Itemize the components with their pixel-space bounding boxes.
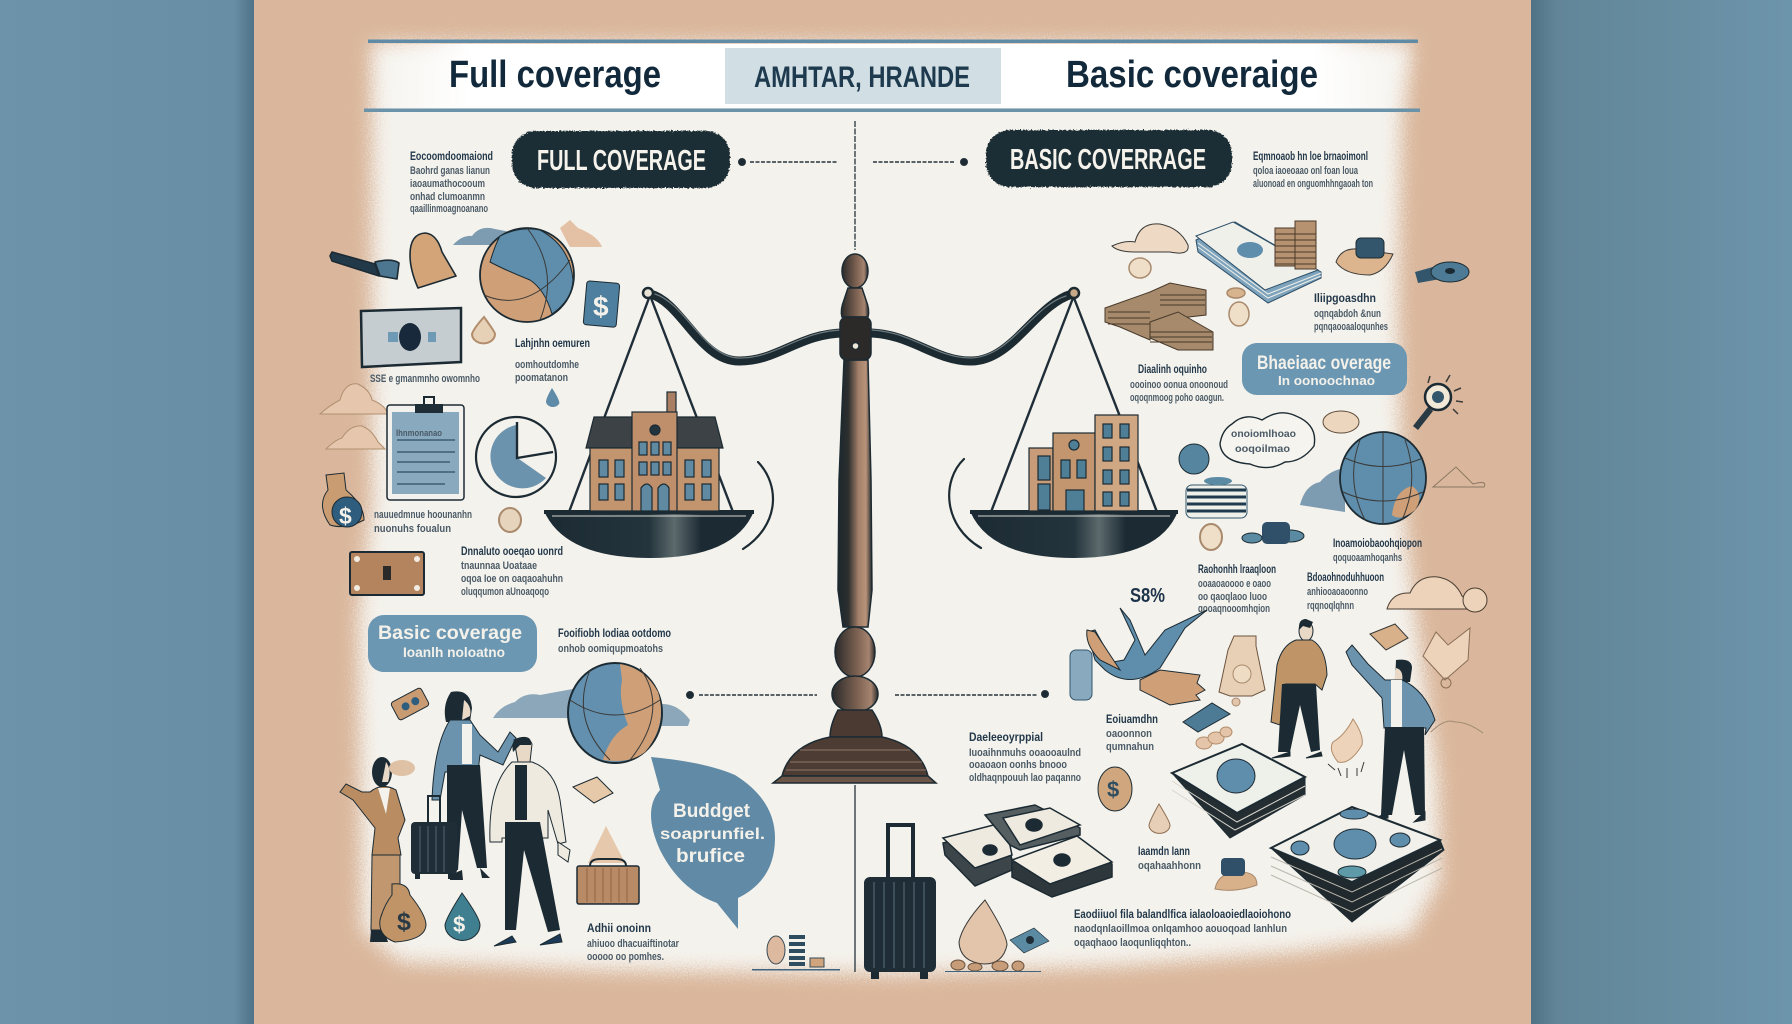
text block: lower centre right: Daeleeoyrppial	[969, 732, 1043, 744]
text block: right of coins: Iliipgoasdhn	[1314, 293, 1376, 305]
icon: small tan cloud	[560, 220, 602, 247]
text block: bottom left: ooooo oo pomhes.	[587, 951, 664, 963]
icon: dollar coin pouch: $	[339, 503, 352, 529]
callout: budget speech bubble: Buddget	[673, 801, 751, 822]
text block: beside left callout	[558, 628, 671, 655]
text block: beside suitcase: tnaunnaa Uoataae	[461, 560, 537, 572]
text block: below cash stack: oqahaahhonn	[1138, 860, 1201, 872]
icon: cash stack top right	[1196, 221, 1321, 303]
icon: speech cloud: ooqoilmao	[1235, 444, 1290, 455]
text block: right middle 2: Raohonhh lraaqloon	[1198, 564, 1276, 576]
scale strings	[569, 298, 1157, 512]
text block: top left: iaoaumathocooum	[410, 178, 485, 190]
scale finial	[840, 254, 871, 360]
icon: cash stack middle	[1172, 744, 1305, 838]
text block: top left: qaaillinmoagnoanano	[410, 203, 488, 215]
callout: blue pill right	[1242, 343, 1407, 395]
text block: top right	[1253, 151, 1373, 190]
figure: woman with blue jacket	[432, 691, 516, 880]
scale base	[773, 627, 936, 783]
text block: left of blue pill	[1130, 364, 1228, 404]
scale beam	[643, 288, 1079, 361]
text block: top left: onhad clumoanmn	[410, 191, 485, 203]
icon: speech cloud	[1220, 413, 1315, 468]
icon: coins on tan base	[1215, 858, 1257, 890]
icon: cash stack large	[1271, 807, 1444, 922]
icon: black rolling suitcase small	[411, 796, 457, 879]
text block: right middle 1: qoquoaamhoqanhs	[1333, 552, 1402, 564]
icon: cloud beside right globe	[1300, 468, 1345, 512]
connector: lower dashes and centre line	[686, 690, 1048, 972]
icon: cloud top right	[1112, 224, 1188, 253]
text block: right of coins: oqnqabdoh &nun	[1314, 308, 1381, 320]
text block: middle left: poomatanon	[515, 372, 568, 384]
icon: coin right of scale	[1200, 524, 1222, 550]
text block: under clock: nauuedmnue hoounanhn	[374, 509, 472, 521]
text block: right of coins	[1314, 293, 1388, 333]
icon: dollar coin pouch	[322, 473, 364, 529]
callout: blue pill right: In oonoochnao	[1278, 373, 1375, 388]
icon: paper clouds left	[320, 384, 388, 449]
figure: man in cream jacket	[490, 737, 570, 946]
icon: clipboard: Ihnmonanao	[396, 428, 442, 438]
callout: basic coverage left	[368, 615, 537, 672]
text block: under bird: qumnahun	[1106, 741, 1154, 753]
text block: lower centre right: ooaoaon oonhs bnooo	[969, 759, 1067, 771]
balance scale	[544, 254, 1178, 783]
text block: right middle 1: Inoamoiobaoohqiopon	[1333, 538, 1422, 550]
header centre box	[725, 48, 1001, 104]
percentage label: S8%	[1130, 585, 1165, 607]
text block: lower centre right: Iuoaihnmuhs ooaooaulnd	[969, 747, 1081, 759]
icon: large house on left pan	[586, 392, 723, 511]
text block: right middle 3: anhiooaoaoonno	[1307, 586, 1368, 598]
text block: top right: aluonoad en onguomhhngaoah ton	[1253, 178, 1373, 190]
icon: black suitcase large	[864, 825, 936, 979]
text block: right middle 3: rqqnoqlqhnn	[1307, 600, 1354, 612]
text block: bottom left	[587, 923, 680, 963]
panel: off-white comparison area	[358, 44, 1440, 974]
icon: cloud far right	[1387, 577, 1487, 612]
heading: basic coverage: Basic coveraige	[1066, 54, 1318, 96]
text block: top right: qoloa iaoeoaao onl foan loua	[1253, 165, 1359, 177]
text block: bottom right	[1074, 909, 1291, 949]
icon: bird and hands	[1070, 608, 1207, 705]
text block: top left	[410, 151, 493, 215]
text block: right middle 3	[1307, 572, 1384, 612]
icon: tan nuts	[1196, 727, 1232, 749]
icon: blue tilted card	[1010, 928, 1049, 953]
text block: under bird	[1106, 714, 1158, 753]
text block: beside suitcase: Dnnaluto ooeqao uonrd	[461, 546, 563, 558]
text block: top left: Eocoomdoomaiond	[410, 151, 493, 163]
icon: small coin	[499, 508, 521, 532]
icon: tilted tan diamond	[1370, 624, 1408, 650]
text block: right middle 2: qooaqnooomhqion	[1198, 603, 1270, 615]
text block: beside suitcase: oqoa Ioe on oaqaoahuhn	[461, 573, 563, 585]
text block: right of coins: pqnqaooaaloqunhes	[1314, 321, 1388, 333]
icon: dollar droplet	[445, 893, 480, 940]
icon: small card	[390, 687, 430, 721]
text block: beside left callout: onhob oomiqupmoatohs	[558, 643, 663, 655]
icon: coins flat	[1242, 522, 1304, 544]
motion arcs	[743, 459, 981, 549]
icon: clock	[476, 417, 556, 497]
callout: basic coverage left: Ioanlh noloatno	[403, 644, 505, 660]
pill: basic coverage	[986, 130, 1232, 187]
header band	[364, 40, 1420, 112]
icon: top left globe	[480, 228, 574, 322]
icon: city buildings on right pan	[1029, 415, 1138, 511]
icon: tilted small picture	[573, 777, 613, 803]
icon: dollar money bag	[380, 884, 426, 942]
callout: budget speech bubble	[651, 757, 775, 929]
icon: tan flame with stones	[945, 900, 1041, 972]
icon: dollar card	[583, 281, 620, 327]
icon: blue flashlight right	[1415, 262, 1469, 283]
text block: right middle 3: Bdoaohnoduhhuoon	[1307, 572, 1384, 584]
text block: beside suitcase: oluqqumon aUnoaqoqo	[461, 586, 549, 598]
icon: lower left globe	[568, 663, 662, 763]
callout: blue pill right: Bhaeiaac overage	[1257, 353, 1391, 374]
icon: magnifier lightbulb	[1413, 375, 1463, 430]
caption under banknote: SSE e gmanmnho owomnho	[370, 373, 480, 385]
text block: middle left	[515, 338, 590, 384]
icon: blue droplet	[546, 388, 559, 407]
icon: tan arch card	[410, 233, 456, 288]
icon: dollar egg: $	[1107, 777, 1119, 802]
text block: bottom right: oqaqhaoo laoqunliqqhton..	[1074, 937, 1191, 949]
icon: coin drop	[472, 317, 495, 343]
icon: dollar egg	[1098, 767, 1132, 811]
icon: tan shape over briefcase	[588, 826, 625, 863]
icon: two coins	[1227, 288, 1249, 326]
icon: right globe	[1340, 432, 1426, 524]
icon: brown suitcase small	[350, 552, 424, 595]
icon: flame with rays	[1328, 719, 1364, 778]
icon: dollar money bag: $	[397, 908, 411, 936]
text block: bottom left: ahiuoo dhacuaiftinotar	[587, 938, 680, 950]
pill: basic coverage: BASIC COVERRAGE	[1010, 144, 1206, 176]
icon: clipboard	[387, 397, 464, 500]
icon: nut shape	[1323, 411, 1359, 433]
text block: below cash stack	[1138, 846, 1201, 872]
header centre box: AMHTAR, HRANDE	[754, 61, 970, 94]
text block: under bird: Eoiuamdhn	[1106, 714, 1158, 726]
pill: full coverage: FULL COVERAGE	[537, 145, 706, 177]
text block: under clock	[374, 509, 472, 535]
text block: bottom right: naodqnlaoillmoa onlqamhoo aouoqoad lanhlun	[1074, 923, 1287, 935]
icon: blue coin	[1179, 444, 1209, 474]
text block: bottom right: Eaodiiuol fila balandlfica ialaoloaoiedlaoiohono	[1074, 909, 1291, 921]
icon: small triangle sketch	[1433, 467, 1485, 487]
text block: beside left callout: Fooifiobh Iodiaa ootdomo	[558, 628, 671, 640]
icon: small hills sketch	[1431, 721, 1483, 733]
text block: bottom left: Adhii onoinn	[587, 923, 651, 935]
icon: speech cloud: onoiomlhoao	[1231, 429, 1296, 440]
scale column	[838, 360, 872, 627]
text block: top left: Baohrd ganas lianun	[410, 165, 490, 177]
text block: left of blue pill: Diaalinh oquinho	[1138, 364, 1207, 376]
connector: top dashes and centre line	[738, 121, 968, 250]
icon: coin droplet	[1149, 804, 1170, 833]
icon: cloud behind lower globe	[493, 688, 690, 726]
icon: dollar droplet: $	[453, 912, 465, 937]
panel: tan paper sheet	[254, 0, 1531, 1024]
text block: right middle 2: oo qaoqlaoo luoo	[1198, 591, 1267, 603]
icon: leaf sketch	[1423, 628, 1470, 688]
text block: right middle 1	[1333, 538, 1422, 564]
text block: below cash stack: Iaamdn Iann	[1138, 846, 1190, 858]
icon: tan coin stacks	[1105, 283, 1213, 350]
callout: budget speech bubble: soaprunfiel.	[660, 826, 765, 843]
text block: middle left: Lahjnhn oemuren	[515, 338, 590, 350]
background: blue wall right	[1531, 0, 1792, 1024]
icon: coin under cloud	[1129, 258, 1151, 278]
text block: left of blue pill: oqoqnmoog poho oaogun.	[1130, 392, 1224, 404]
text block: under clock: nuonuhs foualun	[374, 523, 451, 535]
icon: blue coin stack	[1186, 477, 1247, 518]
text block: lower centre right	[969, 732, 1081, 784]
callout: basic coverage left: Basic coverage	[378, 623, 522, 644]
text block: under bird: oaoonnon	[1106, 728, 1152, 740]
text block: middle left: oomhoutdomhe	[515, 359, 579, 371]
heading: full coverage: Full coverage	[449, 54, 661, 96]
icon: banknote	[361, 308, 461, 367]
figure: man in tan sweater	[1271, 619, 1327, 758]
scale right pan	[970, 510, 1178, 558]
text block: top right: Eqmnoaob hn loe brnaoimonl	[1253, 151, 1368, 163]
icon: dollar card: $	[593, 291, 609, 322]
figure: woman with tan suit	[340, 757, 415, 942]
text block: beside suitcase	[461, 546, 563, 598]
background: blue wall left	[0, 0, 254, 1024]
scale left pan	[544, 510, 754, 558]
icon: money bundles	[943, 805, 1112, 897]
text block: right middle 2: ooaaoaoooo e oaoo	[1198, 578, 1271, 590]
icon: cloud behind top globe	[453, 228, 510, 245]
icon: coin and stack bottom	[752, 935, 840, 970]
text block: lower centre right: oldhaqnpouuh lao paqanno	[969, 772, 1081, 784]
text block: left of blue pill: oooinoo oonua onoonoud	[1130, 379, 1228, 391]
icon: tan briefcase	[577, 859, 639, 904]
pill: full coverage	[512, 131, 730, 188]
icon: coins on tan blob	[1336, 238, 1393, 275]
text block: right middle 2	[1198, 564, 1276, 615]
callout: budget speech bubble: brufice	[676, 846, 745, 867]
figure: man in blue jacket	[1346, 645, 1435, 822]
icon: flashlight	[330, 252, 399, 279]
icon: tan lantern	[1219, 636, 1265, 706]
icon: blue bar card	[1183, 703, 1230, 732]
